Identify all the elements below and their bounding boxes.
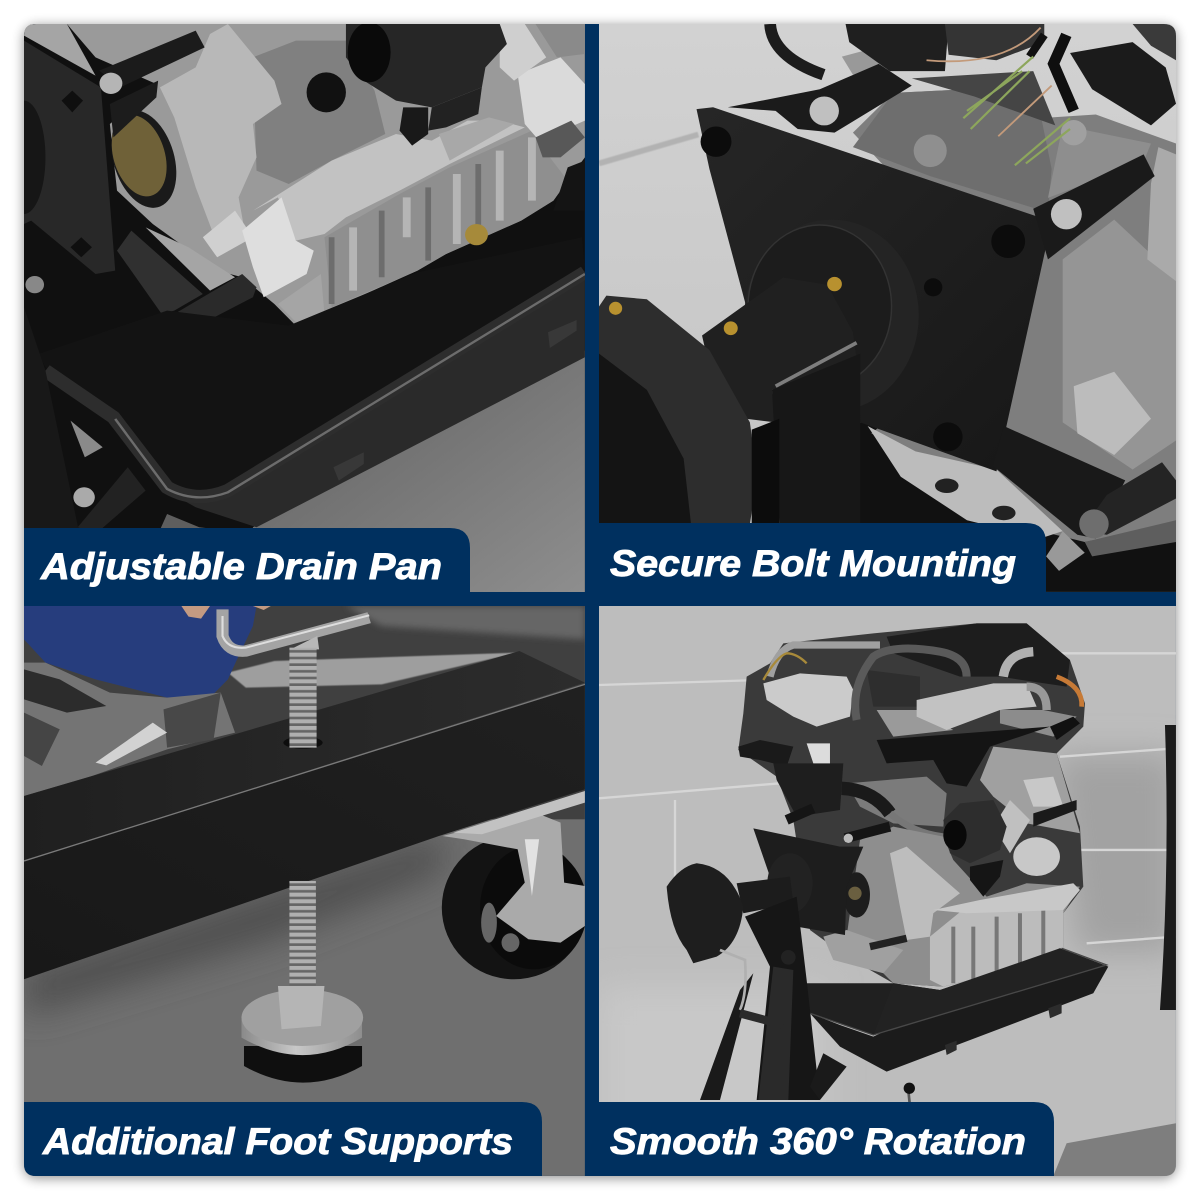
spindle — [737, 877, 793, 913]
hub ring — [748, 225, 892, 388]
dark backdrop — [24, 24, 585, 594]
upper crossbar — [787, 808, 890, 838]
turbo housing — [346, 22, 507, 146]
right bolt — [1051, 199, 1082, 229]
upper crossbar — [99, 31, 205, 87]
panel: additional foot supports — [24, 606, 587, 1176]
mounting plate — [753, 828, 863, 935]
caster wheel — [442, 791, 587, 979]
stand bolt lower — [73, 487, 95, 507]
hand — [181, 606, 271, 619]
crank grip — [740, 1013, 783, 1025]
horizontal divider — [24, 592, 1176, 606]
belt — [770, 24, 823, 75]
bracket behind seal — [110, 81, 158, 137]
pivot bolt — [781, 950, 796, 965]
vertical divider — [585, 24, 599, 1176]
label: secure bolt mounting: Secure Bolt Mounting — [610, 543, 1016, 584]
lower crossbar — [178, 274, 256, 316]
mounting plate — [697, 107, 1052, 471]
jeans — [24, 606, 257, 698]
floor behind stand — [160, 514, 205, 528]
turbocharger — [943, 800, 1077, 897]
panel: adjustable drain pan — [3, 22, 585, 594]
lower crossbar — [870, 938, 907, 947]
hub — [767, 853, 813, 913]
beam — [24, 651, 585, 979]
lighter wall lower left — [599, 987, 827, 1176]
panel: smooth 360 rotation — [599, 606, 1176, 1176]
lower bolt — [1079, 509, 1109, 538]
engine block — [67, 24, 585, 326]
brick wall — [599, 24, 1176, 592]
engine block — [823, 827, 1080, 987]
plate bolts — [62, 91, 92, 257]
lower bolt — [161, 314, 182, 334]
spindle — [702, 278, 860, 422]
beam shadow on floor — [24, 833, 443, 1016]
behind-pan dark area — [805, 953, 1107, 1035]
label: additional foot supports — [24, 1102, 542, 1176]
plate hub — [24, 100, 46, 214]
copper wires — [927, 28, 1052, 136]
crank disc face — [599, 354, 691, 524]
upper floor — [24, 606, 585, 819]
stand front arm — [758, 967, 793, 1100]
engine — [853, 89, 1176, 571]
panel: secure bolt mounting — [599, 24, 1176, 592]
left leg — [700, 973, 753, 1100]
flange bolt — [307, 72, 346, 112]
brick wall — [599, 606, 1176, 1176]
floor streak — [228, 653, 518, 688]
top hoses — [846, 24, 1176, 125]
column — [772, 354, 860, 524]
top-left wiring area — [24, 24, 96, 76]
upper bolt — [809, 96, 839, 125]
cross brace — [810, 1053, 847, 1100]
label: secure bolt mounting — [599, 523, 1046, 592]
timing seal — [112, 111, 176, 208]
fins — [146, 227, 235, 291]
floor — [253, 351, 585, 594]
lower threaded rod — [289, 881, 316, 996]
upper bolt — [844, 834, 853, 843]
plate bolts — [701, 127, 1025, 451]
wires — [963, 57, 1070, 165]
label: additional foot supports: Additional Foot Supports — [42, 1121, 513, 1162]
engine upper — [738, 623, 1085, 987]
shifter knob — [904, 1083, 915, 1107]
shop floor — [857, 422, 1176, 592]
darker wall right — [1053, 753, 1176, 953]
crank disc — [599, 296, 757, 524]
label: smooth 360 rotation: Smooth 360° Rotation — [610, 1121, 1026, 1162]
foot pad — [241, 986, 363, 1083]
grease fittings — [609, 277, 842, 335]
lower bracket — [117, 231, 203, 314]
stand upright — [745, 897, 820, 1100]
cloth gap — [71, 421, 103, 457]
drain pan — [810, 948, 1108, 1072]
drain pan — [46, 266, 585, 528]
mounting plate — [24, 41, 115, 274]
tires — [1160, 725, 1176, 1010]
bracket casting — [842, 51, 885, 75]
upper threaded rod — [289, 648, 317, 748]
drain bolt — [465, 224, 488, 245]
label: adjustable drain pan: Adjustable Drain Pan — [40, 546, 442, 587]
t-handle — [223, 609, 369, 651]
crank disc — [667, 863, 743, 963]
stand upright — [38, 354, 48, 380]
floor — [24, 606, 585, 1176]
floor — [1053, 1123, 1176, 1176]
stand brace — [78, 467, 146, 534]
lower bar — [993, 426, 1125, 538]
lower crossbar — [1081, 462, 1176, 535]
upper bracket — [728, 64, 912, 133]
label: adjustable drain pan — [24, 528, 470, 592]
upper bolt — [99, 73, 122, 94]
mortar shadow — [599, 134, 698, 163]
shoe — [24, 663, 235, 796]
dark gap — [752, 419, 779, 524]
mortar lines — [599, 653, 1176, 943]
label: smooth 360 rotation — [599, 1102, 1054, 1176]
stand bolt — [25, 276, 44, 293]
right bracket — [1033, 154, 1155, 259]
hub disc — [744, 220, 919, 412]
weld — [776, 343, 857, 386]
upper floor glow — [346, 606, 585, 639]
crank handle — [720, 950, 746, 1010]
